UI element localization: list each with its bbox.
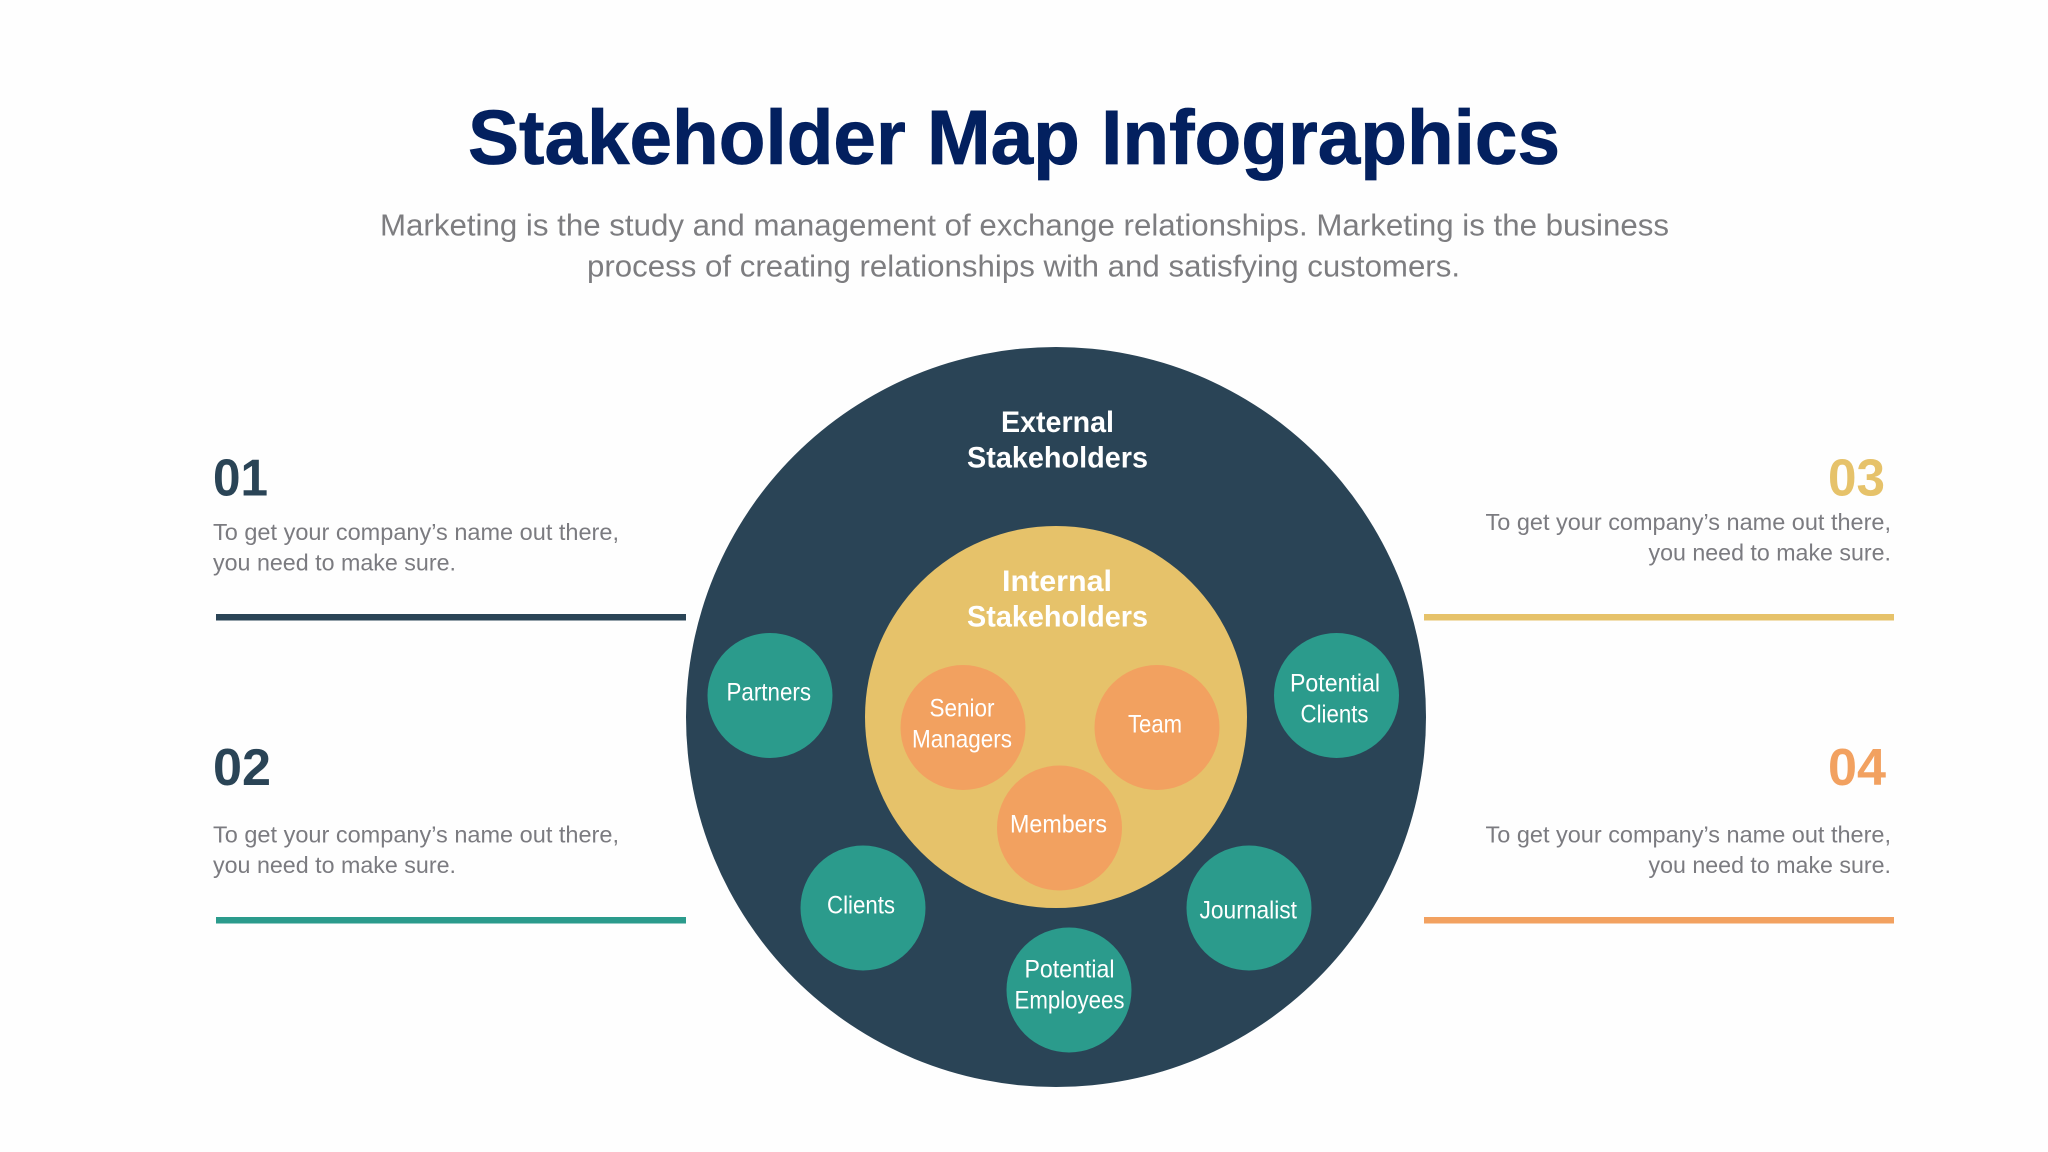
node: clients — [800, 846, 926, 970]
description 02 — [213, 822, 619, 878]
node: senior managers — [900, 665, 1026, 790]
subtitle text block — [380, 208, 1669, 284]
node: potential employees — [1006, 928, 1132, 1052]
heading: internal stakeholders: Internal — [1002, 565, 1112, 598]
node: partners: Partners — [726, 678, 811, 706]
description 01 — [213, 519, 619, 576]
description 04: you need to make sure. — [1648, 852, 1891, 878]
node: senior managers: Managers — [912, 726, 1012, 754]
node: clients: Clients — [827, 892, 895, 920]
node: members: Members — [1010, 810, 1107, 838]
description 01: you need to make sure. — [213, 550, 456, 576]
title: Stakeholder Map Infographics — [468, 95, 1560, 181]
node: members — [997, 766, 1122, 890]
description 04: To get your company’s name out there, — [1486, 822, 1891, 848]
panel: item 04 — [1424, 739, 1894, 924]
heading: external stakeholders: External — [1001, 406, 1114, 439]
description 03 — [1486, 509, 1891, 566]
description 03: To get your company’s name out there, — [1486, 509, 1891, 535]
node: partners — [708, 633, 832, 758]
description 03: you need to make sure. — [1648, 540, 1891, 566]
description 02: you need to make sure. — [213, 852, 456, 878]
node: senior managers: Senior — [930, 694, 994, 722]
chart: stakeholder map — [686, 347, 1426, 1087]
heading: internal stakeholders — [967, 565, 1148, 634]
subtitle text block: process of creating relationships with and satisfying customers. — [587, 248, 1460, 284]
node: journalist — [1186, 846, 1312, 970]
node: potential employees: Potential — [1024, 956, 1114, 984]
heading: external stakeholders: Stakeholders — [967, 442, 1148, 474]
number 01: 01 — [213, 450, 268, 508]
number 02: 02 — [213, 739, 271, 797]
heading: external stakeholders — [967, 406, 1148, 474]
outer circle: external stakeholders — [686, 347, 1426, 1087]
node: team — [1094, 665, 1220, 790]
panel: item 01 — [213, 450, 686, 620]
description 04 — [1486, 822, 1891, 878]
panel: item 02 — [213, 739, 686, 924]
panel: item 03 — [1424, 450, 1894, 620]
description 02: To get your company’s name out there, — [213, 822, 619, 848]
node: potential employees: Employees — [1014, 986, 1124, 1014]
node: potential clients — [1274, 633, 1399, 758]
description 01: To get your company’s name out there, — [213, 519, 619, 545]
node: team: Team — [1128, 710, 1182, 738]
number 03: 03 — [1828, 450, 1885, 508]
node: potential clients: Potential — [1290, 670, 1380, 698]
heading: internal stakeholders: Stakeholders — [967, 600, 1148, 634]
inner circle: internal stakeholders — [865, 526, 1247, 908]
node: journalist: Journalist — [1200, 896, 1297, 924]
node: potential clients: Clients — [1300, 700, 1368, 728]
subtitle text block: Marketing is the study and management of exchange relationships. Marketing is the business — [380, 208, 1669, 242]
number 04: 04 — [1828, 739, 1886, 797]
